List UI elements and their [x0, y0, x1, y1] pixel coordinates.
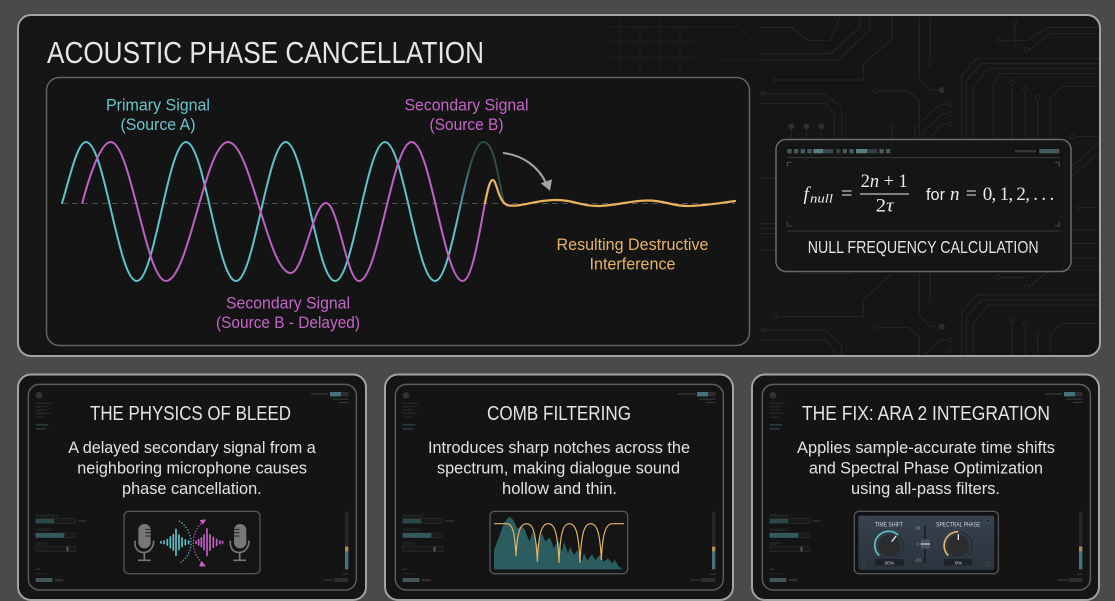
tiny control labels: INTENSITY [403, 528, 422, 532]
label: resulting destructive interference [556, 235, 708, 274]
label: secondary signal source B: (Source B) [430, 115, 504, 134]
tiny control labels [36, 514, 59, 546]
label: secondary signal delayed [216, 294, 360, 332]
panel: the fix, ARA 2 integration [752, 374, 1099, 600]
tiny control labels: DEPTH [770, 542, 782, 546]
body text: A delayed secondary signal from a [68, 438, 316, 457]
knob: spectral phase [936, 522, 980, 566]
tiny control labels: DEPTH [36, 542, 48, 546]
body text: Applies sample-accurate time shifts [797, 438, 1055, 457]
arrow: to resulting signal [503, 153, 552, 191]
plugin interface [854, 511, 998, 574]
label: primary signal [106, 96, 210, 134]
title: ACOUSTIC PHASE CANCELLATION [47, 36, 484, 70]
tiny control labels: INTENSITY [36, 528, 55, 532]
knob: spectral phase: 0% [955, 560, 962, 566]
panel: main acoustic phase cancellation [18, 15, 1100, 356]
knob: time shift: TIME SHIFT [875, 522, 903, 529]
tiny control labels: FREQUENCY [770, 514, 793, 518]
formula: 2τ [876, 196, 895, 216]
label: secondary signal delayed: Secondary Signal [226, 294, 350, 312]
tiny control labels: DEPTH [403, 542, 415, 546]
fader: -10 [915, 558, 921, 563]
tiny control labels [403, 514, 426, 546]
tiny control labels: FREQUENCY [403, 514, 426, 518]
formula status strip [787, 149, 1059, 231]
fader: 10 [915, 526, 921, 531]
tiny control labels: FREQUENCY [36, 514, 59, 518]
wave: resulting destructive interference [485, 180, 735, 206]
tiny control labels: DYNAMICS [770, 528, 789, 532]
comb response curve [494, 524, 624, 563]
icon: comb filter spectrum [490, 511, 628, 574]
body text: phase cancellation. [122, 479, 262, 498]
fader: 0 [916, 542, 919, 547]
formula: 2n + 1 [861, 172, 908, 192]
label: resulting destructive interference: Interference [590, 254, 676, 274]
body text: hollow and thin. [502, 479, 617, 498]
icon: two microphones with opposing waves [124, 511, 260, 574]
heading: COMB FILTERING [487, 402, 631, 425]
label: secondary signal delayed: (Source B - Delayed) [216, 313, 360, 332]
circuit board background pattern [760, 17, 1098, 355]
tiny control labels [770, 514, 793, 546]
body text [428, 438, 690, 498]
panel: null frequency formula [776, 140, 1071, 272]
heading: THE PHYSICS OF BLEED [90, 402, 291, 425]
body text: Introduces sharp notches across the [428, 438, 690, 457]
label: resulting destructive interference: Resulting Destructive [556, 235, 708, 254]
formula: = [966, 183, 977, 205]
body text: neighboring microphone causes [77, 458, 307, 478]
knob: time shift [875, 522, 904, 566]
body text: spectrum, making dialogue sound [437, 458, 680, 478]
formula: n [950, 184, 960, 205]
wave: secondary signal, source B delayed [82, 142, 485, 281]
wave: primary signal, source A [62, 142, 504, 281]
icon: left microphone [135, 524, 154, 560]
panel: the physics of bleed [18, 374, 366, 600]
formula caption: NULL FREQUENCY CALCULATION [808, 237, 1039, 257]
body text: using all-pass filters. [851, 479, 1000, 498]
panel: waveform chart [46, 78, 750, 346]
icon: arrowheads [199, 519, 206, 566]
formula: 0, 1, 2, . . . [983, 184, 1054, 205]
formula: for [926, 185, 945, 204]
label: primary signal: Primary Signal [106, 96, 210, 114]
body text: and Spectral Phase Optimization [809, 458, 1043, 478]
body text [68, 438, 316, 498]
label: primary signal: (Source A) [120, 115, 196, 134]
fader [915, 526, 930, 563]
formula: f [804, 184, 812, 205]
label: secondary signal source B: Secondary Signal [404, 96, 528, 114]
formula: = [841, 183, 852, 205]
formula: null [810, 190, 833, 206]
body text [797, 438, 1055, 498]
baseline [62, 202, 735, 204]
knob: spectral phase: SPECTRAL PHASE [936, 522, 980, 529]
knob: time shift: 30% [884, 560, 895, 566]
label: secondary signal source B [404, 96, 528, 134]
formula [804, 172, 1054, 216]
heading: THE FIX: ARA 2 INTEGRATION [802, 402, 1050, 425]
spectrum area [494, 517, 623, 569]
panel: comb filtering [385, 374, 733, 600]
icon: right microphone [230, 524, 249, 560]
icon: dotted arcs [179, 521, 203, 563]
icon: magenta wave [196, 529, 223, 556]
icon: cyan wave [161, 529, 189, 555]
